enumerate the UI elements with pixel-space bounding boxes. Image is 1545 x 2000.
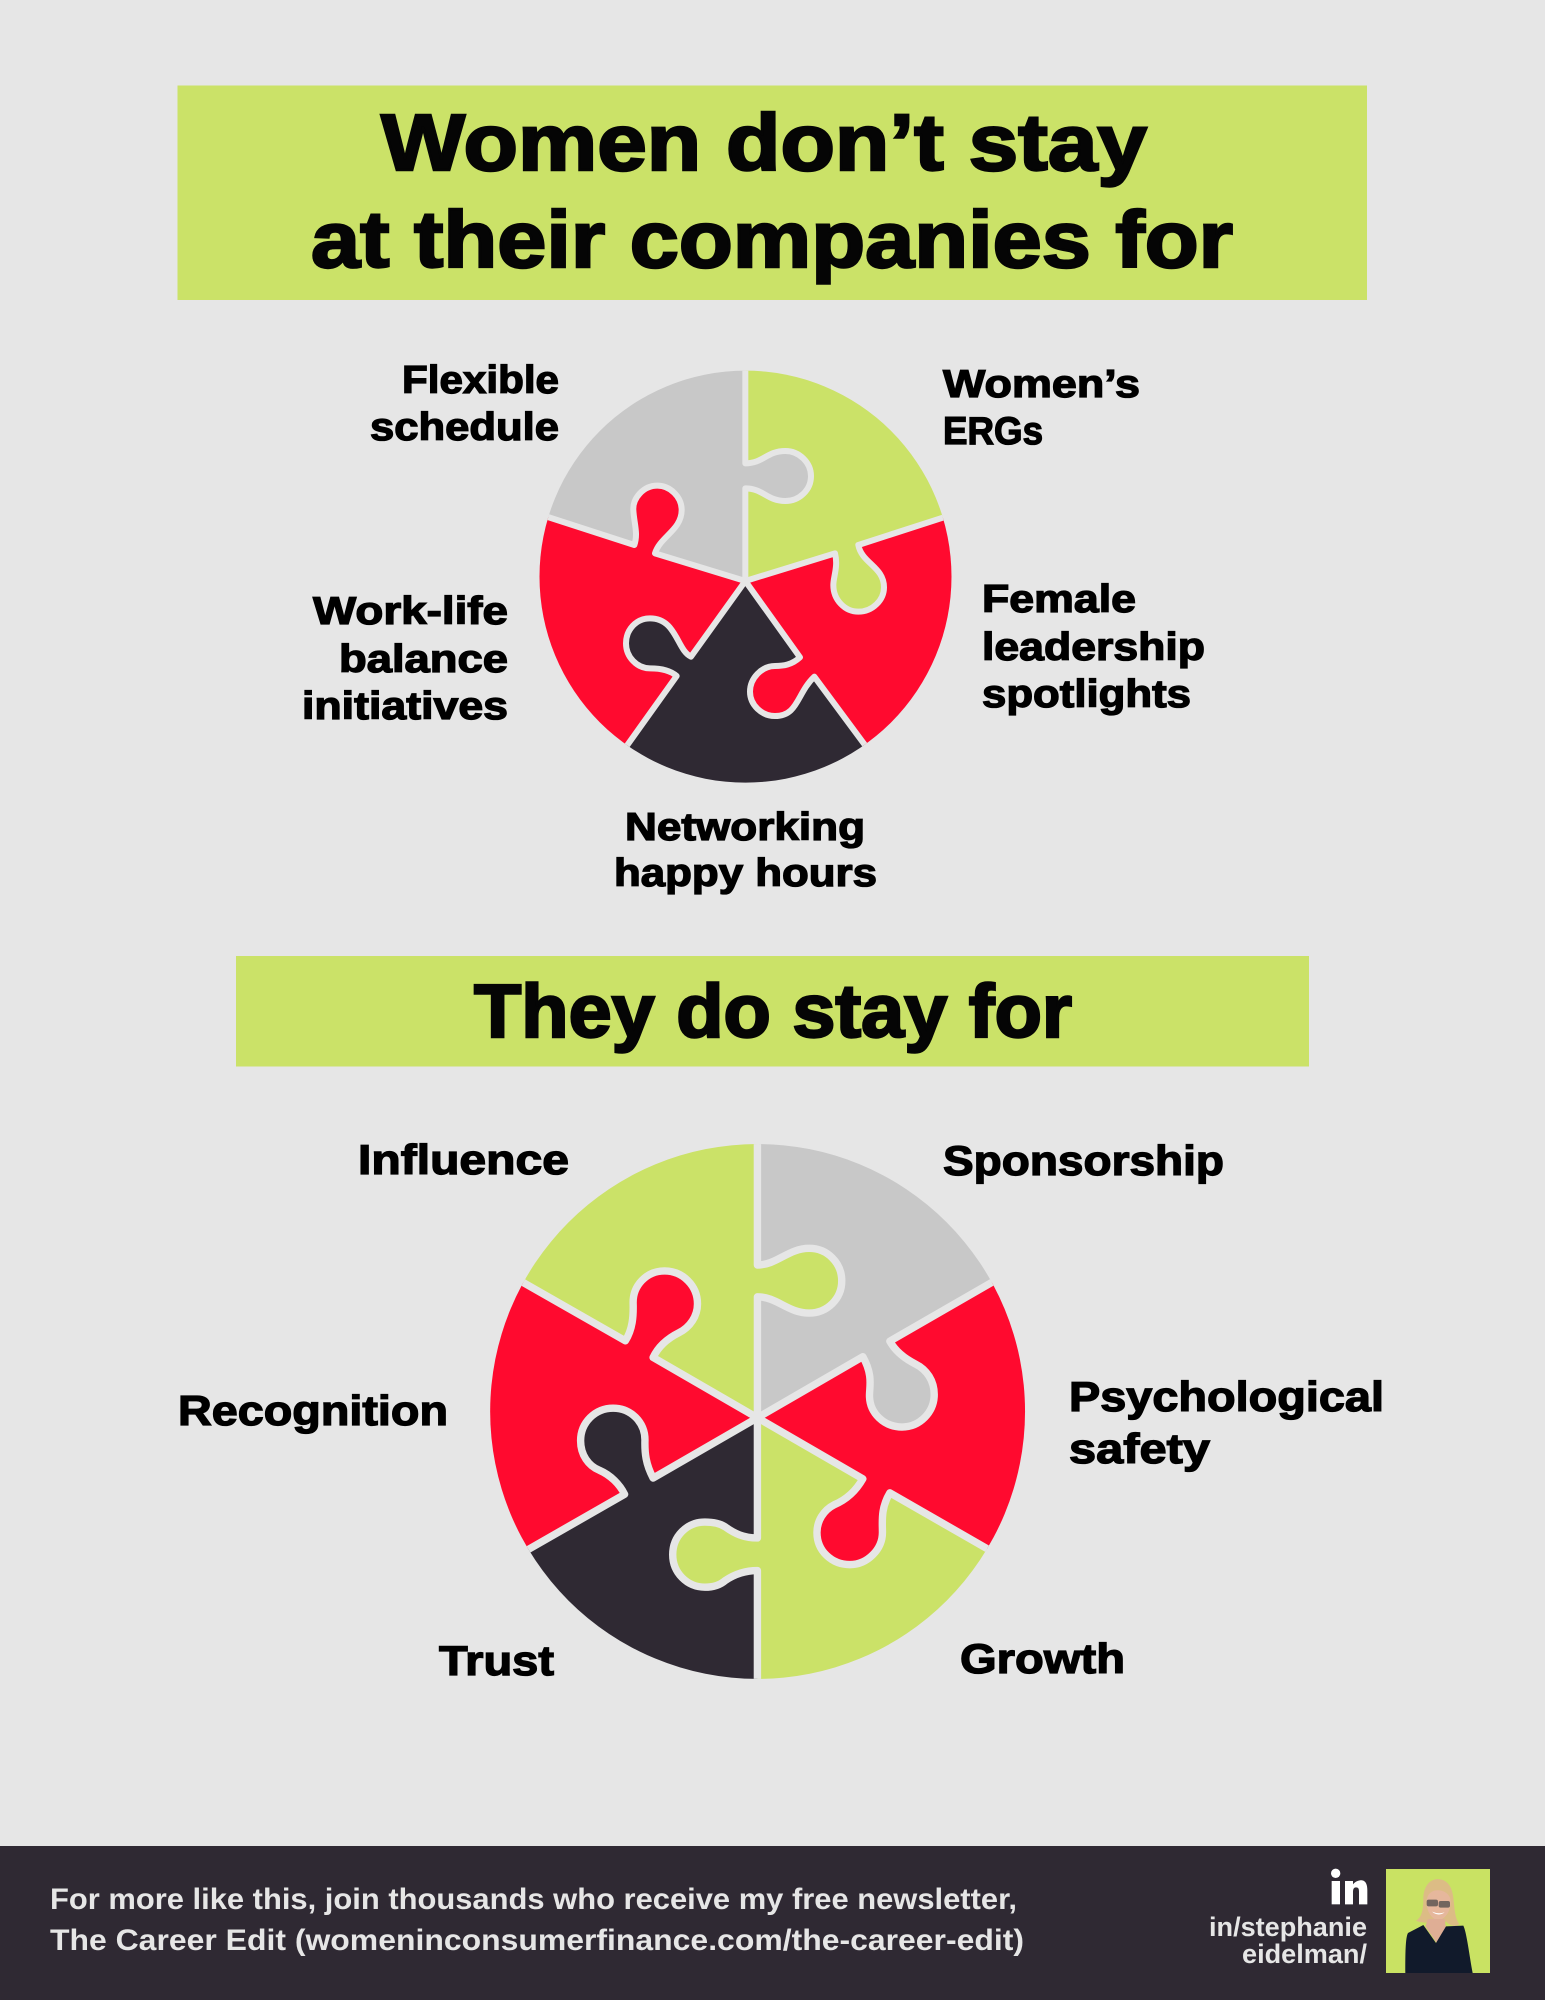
icon: LinkedIn — [1331, 1869, 1367, 1904]
label: Flexible schedule: Flexible — [402, 359, 559, 402]
label: Psychological safety: Psychological — [1069, 1373, 1384, 1420]
label: Networking happy hours — [614, 806, 877, 895]
section banner: They do stay for: They do stay for — [474, 969, 1072, 1053]
label: Influence: Influence — [358, 1136, 569, 1183]
puzzle chart: what women don't stay for — [540, 370, 952, 783]
title text — [311, 98, 1233, 284]
piece: Recognition — [490, 1274, 750, 1550]
label: Women's ERGs: Women’s — [943, 363, 1140, 406]
label: Work-life balance initiatives: initiatives — [302, 685, 508, 728]
piece: Sponsorship — [761, 1144, 990, 1424]
title banner — [178, 86, 1367, 300]
label: Work-life balance initiatives — [302, 590, 508, 728]
LinkedIn handle: in/stephanie — [1209, 1912, 1367, 1942]
label: Female leadership spotlights — [982, 578, 1205, 716]
label: Psychological safety: safety — [1069, 1425, 1211, 1472]
label: Flexible schedule: schedule — [370, 406, 559, 449]
footer newsletter text: The Career Edit (womeninconsumerfinance.com/the-career-edit) — [50, 1924, 1024, 1957]
puzzle chart: what they do stay for — [490, 1144, 1026, 1679]
label: Female leadership spotlights: spotlights — [982, 673, 1191, 716]
footer band — [0, 1846, 1545, 2000]
piece: Psychological safety — [764, 1282, 1026, 1561]
label: Growth: Growth — [960, 1635, 1125, 1682]
piece: Female leadership spotlights — [750, 518, 952, 745]
piece: Flexible schedule — [549, 370, 808, 577]
label: Recognition: Recognition — [178, 1387, 448, 1434]
portrait photo — [1386, 1869, 1490, 1973]
title text: at their companies for — [311, 195, 1233, 284]
label: Networking happy hours: Networking — [625, 806, 865, 849]
piece: Growth — [676, 1424, 987, 1679]
title text: Women don’t stay — [381, 98, 1148, 187]
label: Work-life balance initiatives: balance — [339, 638, 508, 681]
LinkedIn handle — [1209, 1912, 1367, 1969]
footer newsletter text: For more like this, join thousands who receive my free newsletter, — [50, 1883, 1017, 1916]
piece: Trust — [528, 1412, 758, 1679]
label: Women's ERGs: ERGs — [943, 410, 1043, 453]
piece: Influence — [523, 1144, 838, 1412]
label: Psychological safety — [1069, 1373, 1384, 1472]
label: Female leadership spotlights: Female — [982, 578, 1136, 621]
label: Trust: Trust — [439, 1637, 554, 1684]
piece: Work-life balance initiatives — [540, 488, 740, 746]
label: Female leadership spotlights: leadership — [982, 626, 1205, 669]
label: Women's ERGs — [943, 363, 1140, 453]
label: Work-life balance initiatives: Work-life — [313, 590, 508, 633]
piece: Networking happy hours — [627, 586, 865, 783]
piece: Women's ERGs — [746, 370, 943, 609]
label: Sponsorship: Sponsorship — [943, 1137, 1224, 1184]
section banner: They do stay for — [236, 956, 1309, 1066]
label: Flexible schedule — [370, 359, 559, 449]
footer newsletter text — [50, 1883, 1024, 1957]
LinkedIn handle: eidelman/ — [1242, 1939, 1367, 1969]
label: Networking happy hours: happy hours — [614, 852, 877, 895]
